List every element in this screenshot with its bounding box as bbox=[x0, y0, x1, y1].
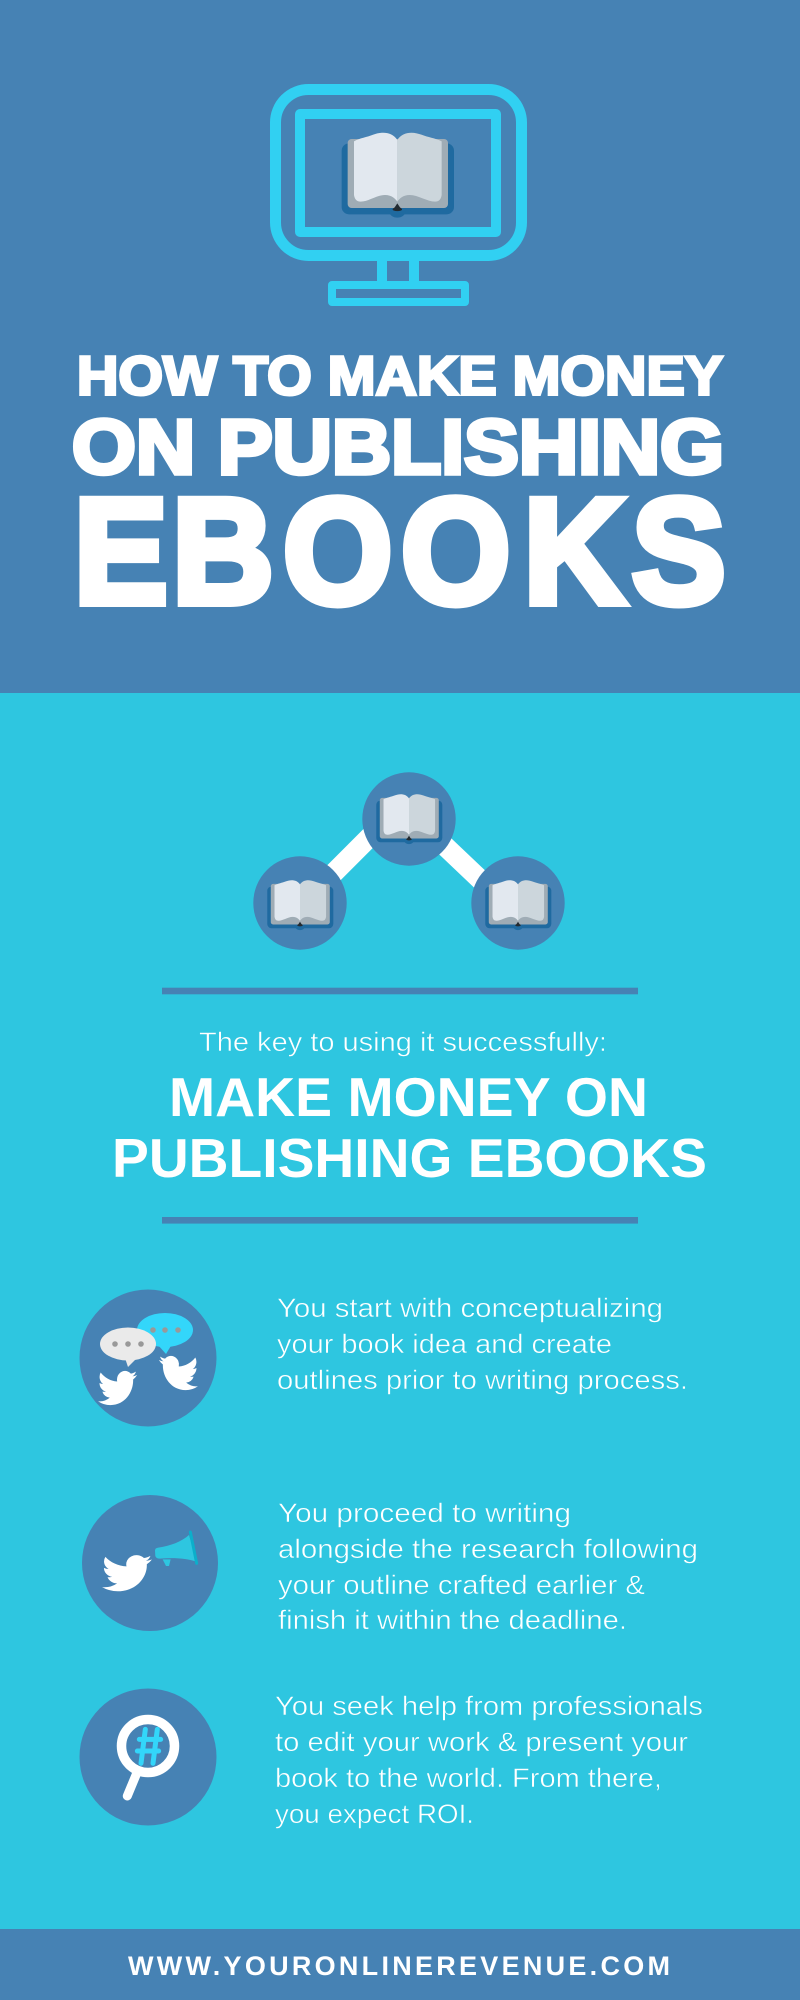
title: HOW TO MAKE MONEY bbox=[77, 344, 723, 406]
icon: monitor with book bbox=[276, 90, 522, 302]
text: step three: book to the world. From there, bbox=[275, 1763, 662, 1793]
footer bbox=[0, 1929, 800, 2000]
heading: MAKE MONEY ON bbox=[169, 1066, 648, 1128]
heading bbox=[112, 1066, 707, 1189]
text: step two: alongside the research following bbox=[278, 1534, 698, 1564]
text: step one: You start with conceptualizing bbox=[277, 1293, 663, 1323]
text: step three: You seek help from professionals bbox=[275, 1691, 703, 1721]
subheading: The key to using it successfully: bbox=[199, 1027, 607, 1057]
text: step two: You proceed to writing bbox=[278, 1498, 571, 1528]
footer: WWW.YOURONLINEREVENUE.COM bbox=[128, 1951, 670, 1981]
title: ON PUBLISHING bbox=[72, 404, 724, 490]
text: step two: finish it within the deadline. bbox=[278, 1605, 627, 1635]
text: step one: outlines prior to writing process. bbox=[277, 1365, 688, 1395]
heading: PUBLISHING EBOOKS bbox=[112, 1127, 707, 1189]
text: step three: you expect ROI. bbox=[275, 1799, 474, 1829]
icon: bird with megaphone bbox=[82, 1495, 218, 1631]
text: step two bbox=[278, 1498, 698, 1635]
text: step three bbox=[275, 1691, 703, 1829]
network of books bbox=[253, 772, 565, 950]
panel: header bbox=[0, 0, 800, 693]
text: step two: your outline crafted earlier & bbox=[278, 1570, 645, 1600]
text: step one: your book idea and create bbox=[277, 1329, 612, 1359]
icon: chatting birds bbox=[80, 1290, 216, 1426]
icon: hashtag magnifier bbox=[80, 1688, 216, 1826]
title: EBOOKS bbox=[74, 467, 726, 635]
title bbox=[72, 344, 726, 635]
text: step one bbox=[277, 1293, 688, 1395]
text: step three: to edit your work & present your bbox=[275, 1727, 688, 1757]
